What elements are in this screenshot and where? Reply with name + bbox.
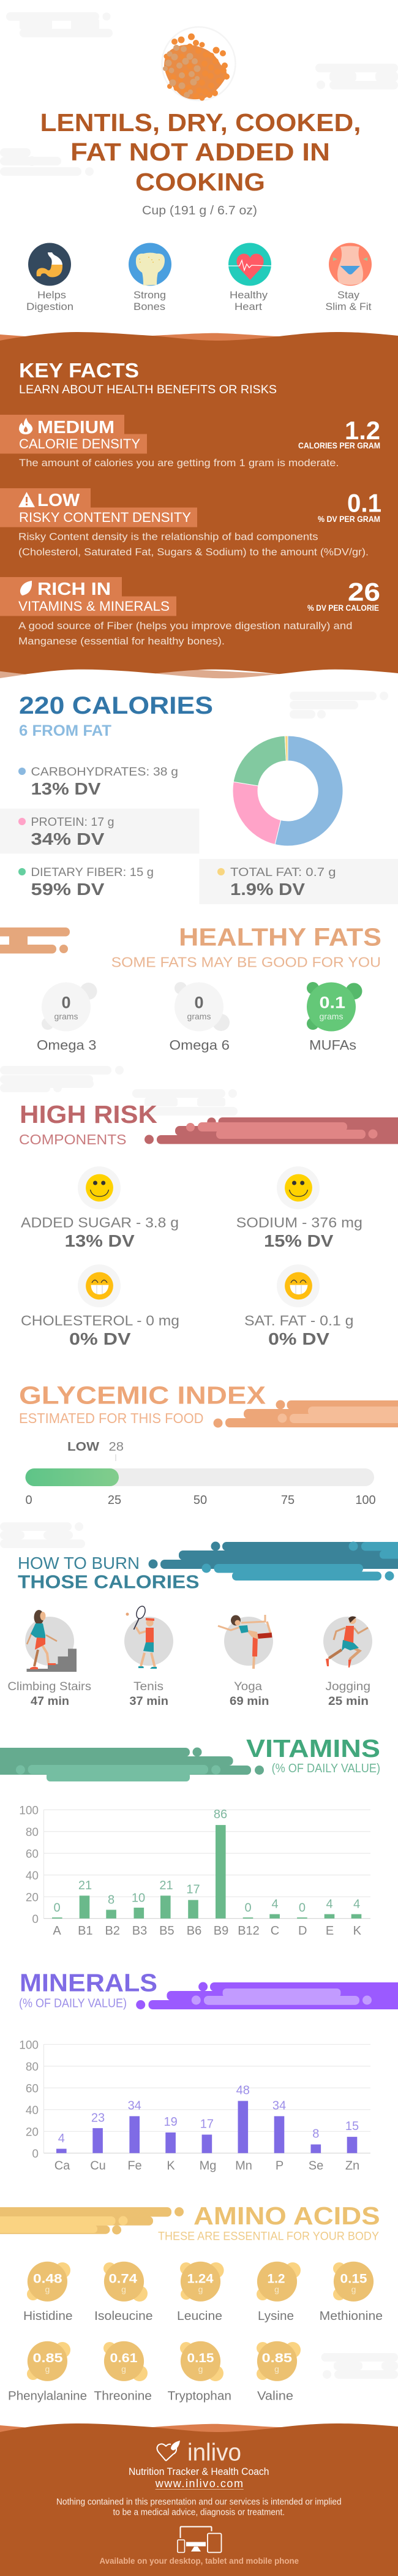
legend: dietary fiber: DIETARY FIBER: 15 g <box>31 866 154 879</box>
donut chart <box>233 736 343 846</box>
activity: yoga <box>218 1615 273 1708</box>
bar chart: vitamins: C <box>271 1924 279 1938</box>
header banner <box>213 1400 398 1427</box>
heading: 220 CALORIES <box>19 692 213 719</box>
bar chart: minerals: 17 <box>200 2117 214 2131</box>
fact: risky content density: 0.1 <box>347 489 381 517</box>
bar chart: vitamins: B2 <box>105 1924 120 1938</box>
item: added sugar: ADDED SUGAR - 3.8 g <box>21 1215 179 1231</box>
bar chart: vitamins: 60 <box>26 1848 39 1861</box>
benefit: healthy heart: Heart <box>235 301 262 312</box>
amino: tryptophan: Tryptophan <box>168 2389 231 2403</box>
bar chart: vitamins: B12 <box>238 1924 260 1938</box>
title: COOKING <box>135 168 265 196</box>
bar chart: minerals: Cu <box>90 2159 106 2173</box>
bar chart: vitamins: B3 <box>132 1924 147 1938</box>
amino: histidine <box>23 2262 73 2323</box>
item: cholesterol <box>21 1264 179 1348</box>
gauge bar: 50 <box>193 1494 207 1507</box>
amino: tryptophan: g <box>198 2364 203 2374</box>
activity: yoga: Yoga <box>234 1680 262 1693</box>
header banner <box>0 2207 184 2235</box>
heading: HEALTHY FATS <box>179 923 381 951</box>
amino: threonine: Threonine <box>94 2389 152 2403</box>
tagline and url <box>129 2466 269 2490</box>
amino: phenylalanine: g <box>45 2364 50 2374</box>
amino: valine: g <box>274 2364 279 2374</box>
amino: leucine: Leucine <box>177 2310 222 2323</box>
item: cholesterol: 0% DV <box>69 1329 131 1348</box>
fact: calorie density: CALORIES PER GRAM <box>298 441 380 450</box>
fact: calorie density: The amount of calories you are getting from 1 gram is moderate. <box>19 458 339 469</box>
panel: how to burn those calories <box>7 1541 398 1708</box>
bar chart: minerals: 20 <box>26 2126 39 2139</box>
fact: calorie density: CALORIE DENSITY <box>19 436 140 451</box>
gauge bar <box>25 1440 376 1507</box>
activity: tennis: 37 min <box>129 1695 168 1708</box>
title: LENTILS, DRY, COOKED, <box>40 108 361 137</box>
amino: tryptophan: 0.15 <box>187 2351 214 2365</box>
badge: omega 3: grams <box>54 1011 78 1021</box>
bar chart: vitamins: 100 <box>19 1805 39 1817</box>
legend: total fat <box>200 859 398 904</box>
fact: risky content density: % DV PER GRAM <box>318 515 380 524</box>
panel: minerals <box>19 1969 398 2173</box>
amino: valine <box>257 2341 301 2403</box>
serving size: Cup (191 g / 6.7 oz) <box>142 204 257 217</box>
badge: mufas: MUFAs <box>309 1038 356 1053</box>
fact: risky content density: Risky Content density is the relationship of bad components <box>18 532 318 543</box>
bar chart: minerals: 23 <box>91 2111 105 2125</box>
amino: leucine: g <box>198 2284 203 2294</box>
bar chart: minerals: 4 <box>58 2132 65 2145</box>
amino: histidine: Histidine <box>23 2310 73 2323</box>
benefit: helps digestion: Digestion <box>26 301 73 312</box>
heading: MINERALS <box>20 1969 157 1997</box>
badge: omega 3: Omega 3 <box>37 1038 97 1053</box>
activity: jogging: 25 min <box>328 1695 369 1708</box>
badge: omega 6 <box>169 982 230 1053</box>
panel: header <box>26 27 372 312</box>
bar chart: vitamins: 80 <box>26 1826 39 1839</box>
amino: threonine <box>94 2341 152 2403</box>
amino: lysine: g <box>274 2284 279 2294</box>
fact: risky content density: RISKY CONTENT DENSITY <box>19 510 191 525</box>
heading: HIGH RISK <box>20 1100 157 1128</box>
logo: inlivo <box>187 2439 241 2466</box>
item: saturated fat: 0% DV <box>268 1329 329 1348</box>
legend: protein: 34% DV <box>31 829 105 848</box>
bar chart: vitamins: 4 <box>326 1897 333 1911</box>
bar chart: minerals: 40 <box>26 2104 39 2117</box>
bar chart: vitamins: 17 <box>186 1883 200 1897</box>
legend: carbohydrates: 13% DV <box>31 779 101 798</box>
fact: rich in vitamins and minerals: 26 <box>348 577 380 606</box>
bar chart: vitamins: K <box>353 1924 362 1938</box>
badge: omega 6: 0 <box>194 994 204 1012</box>
amino: valine: Valine <box>257 2389 293 2403</box>
heading: VITAMINS <box>246 1734 380 1762</box>
bar chart: minerals: 8 <box>312 2127 319 2140</box>
bar chart: vitamins: 21 <box>78 1879 92 1892</box>
heading <box>158 2202 380 2243</box>
header banner <box>148 1541 398 1581</box>
amino: lysine: Lysine <box>258 2310 294 2323</box>
icon: leaf <box>20 581 32 595</box>
gauge bar: 28 <box>109 1440 124 1454</box>
fact: rich in vitamins and minerals: VITAMINS & MINERALS <box>18 599 170 614</box>
legend: carbohydrates: CARBOHYDRATES: 38 g <box>31 765 178 779</box>
header banner <box>136 1982 398 2009</box>
bar chart: vitamins: A <box>53 1924 61 1938</box>
badge: omega 3: 0 <box>61 994 71 1012</box>
activity: jogging: Jogging <box>326 1680 370 1693</box>
gauge bar: LOW <box>67 1440 99 1454</box>
disclaimer: to be a medical advice, diagnosis or treatment. <box>113 2508 285 2518</box>
heading <box>18 1554 200 1593</box>
amino: histidine: 0.48 <box>33 2272 62 2286</box>
bar chart: minerals: 34 <box>272 2099 286 2112</box>
amino: phenylalanine <box>8 2341 87 2403</box>
heading: LEARN ABOUT HEALTH BENEFITS OR RISKS <box>19 383 277 396</box>
heading <box>19 359 277 396</box>
bar chart: minerals: 0 <box>32 2148 39 2161</box>
heading <box>111 923 381 970</box>
food photo: red lentils <box>162 27 235 100</box>
heading: 6 FROM FAT <box>19 722 111 739</box>
amino: isoleucine <box>94 2262 153 2323</box>
amino: isoleucine: g <box>121 2284 126 2294</box>
amino: lysine <box>257 2262 301 2323</box>
tagline and url: www.inlivo.com <box>155 2477 243 2490</box>
title <box>40 108 361 196</box>
fact: calorie density: 1.2 <box>345 416 380 445</box>
panel: healthy fats <box>0 923 381 1053</box>
bar chart: vitamins: 4 <box>353 1897 360 1911</box>
amino: threonine: g <box>121 2364 126 2374</box>
benefit: strong bones: Bones <box>133 301 165 312</box>
heading: ESTIMATED FOR THIS FOOD <box>19 1410 203 1426</box>
amino: lysine: 1.2 <box>267 2272 285 2286</box>
item: saturated fat: SAT. FAT - 0.1 g <box>244 1313 354 1329</box>
panel: footer <box>0 2423 398 2576</box>
item: sodium: SODIUM - 376 mg <box>236 1215 362 1231</box>
icon: warning triangle <box>18 492 35 507</box>
fact: calorie density: MEDIUM <box>37 418 115 437</box>
bar chart: minerals: 80 <box>26 2061 39 2074</box>
bar chart: minerals: K <box>167 2159 175 2173</box>
bar chart: minerals: Mg <box>200 2159 216 2173</box>
bar chart: vitamins: B6 <box>187 1924 201 1938</box>
panel: amino acids <box>0 2202 383 2403</box>
heading: KEY FACTS <box>19 359 139 382</box>
icon: flame <box>19 418 32 434</box>
item: sodium <box>236 1166 362 1250</box>
activity: yoga: 69 min <box>230 1695 269 1708</box>
gauge bar: 25 <box>108 1494 121 1507</box>
item: added sugar: 13% DV <box>65 1231 135 1250</box>
bar chart: minerals: Zn <box>345 2159 359 2173</box>
panel: high risk components <box>19 1100 398 1348</box>
bar chart: minerals: 60 <box>26 2083 39 2095</box>
legend: protein <box>0 809 200 854</box>
heading <box>19 1381 266 1426</box>
bar chart: minerals: 15 <box>345 2120 359 2133</box>
item: sodium: 15% DV <box>264 1231 334 1250</box>
bar chart: vitamins: 10 <box>132 1891 145 1905</box>
title: FAT NOT ADDED IN <box>70 138 330 166</box>
amino: leucine <box>177 2262 224 2323</box>
bar chart: minerals: P <box>276 2159 283 2173</box>
amino: isoleucine: 0.74 <box>109 2272 137 2286</box>
heading: THESE ARE ESSENTIAL FOR YOUR BODY <box>158 2230 379 2243</box>
amino: methionine: Methionine <box>320 2310 383 2323</box>
header banner <box>0 927 70 953</box>
bar chart: vitamins: 20 <box>26 1892 39 1904</box>
badge: omega 3 <box>37 983 97 1053</box>
bar chart: vitamins <box>19 1805 370 1938</box>
benefit: strong bones <box>129 243 171 312</box>
bar chart: vitamins: B9 <box>214 1924 228 1938</box>
benefit: healthy heart <box>228 243 271 312</box>
disclaimer <box>56 2498 342 2518</box>
legend: protein: PROTEIN: 17 g <box>31 815 115 829</box>
panel: key facts <box>0 332 398 678</box>
bar chart: vitamins: 0 <box>299 1902 306 1915</box>
activity: jogging <box>323 1616 372 1708</box>
bar chart: minerals <box>19 2039 370 2173</box>
badge: omega 6: Omega 6 <box>169 1038 230 1053</box>
fact: risky content density: LOW <box>37 491 80 510</box>
heading <box>19 1969 157 2011</box>
legend: carbohydrates <box>18 765 178 798</box>
logo <box>157 2439 241 2466</box>
amino: threonine: 0.61 <box>110 2351 138 2365</box>
item: cholesterol: CHOLESTEROL - 0 mg <box>21 1313 179 1329</box>
bar chart: minerals: 19 <box>163 2115 178 2129</box>
legend: total fat: TOTAL FAT: 0.7 g <box>230 866 336 879</box>
bar chart: vitamins: 21 <box>159 1879 173 1892</box>
badge: omega 6: grams <box>187 1011 211 1021</box>
fact: rich in vitamins and minerals: Manganese (essential for healthy bones). <box>18 636 225 647</box>
bar chart: minerals: 34 <box>128 2099 141 2112</box>
bar chart: vitamins: 86 <box>214 1808 227 1821</box>
bar chart: vitamins: 8 <box>108 1893 115 1906</box>
badge: mufas: 0.1 <box>320 994 345 1012</box>
heading: GLYCEMIC INDEX <box>19 1381 266 1409</box>
activity: climbing stairs <box>7 1610 91 1708</box>
tagline and url: Nutrition Tracker & Health Coach <box>129 2466 269 2477</box>
fact: rich in vitamins and minerals <box>0 577 380 647</box>
activity: tennis: Tenis <box>133 1680 163 1693</box>
fact: calorie density <box>0 415 380 469</box>
panel: calories <box>0 692 398 904</box>
amino: valine: 0.85 <box>262 2351 292 2365</box>
legend: total fat: 1.9% DV <box>230 880 305 899</box>
availability note: Available on your desktop, tablet and mobile phone <box>99 2556 299 2566</box>
bar chart: minerals: Fe <box>127 2159 142 2173</box>
amino: leucine: 1.24 <box>187 2272 214 2286</box>
amino: phenylalanine: Phenylalanine <box>8 2389 87 2403</box>
activity: climbing stairs: Climbing Stairs <box>7 1680 91 1693</box>
benefit: helps digestion: Helps <box>37 289 66 301</box>
bar chart: vitamins: E <box>326 1924 334 1938</box>
amino: tryptophan <box>168 2341 231 2403</box>
icon: devices <box>178 2526 222 2552</box>
legend: dietary fiber <box>18 866 154 899</box>
bar chart: minerals: Mn <box>235 2159 252 2173</box>
fact: risky content density <box>0 488 381 557</box>
bar chart: vitamins: 0 <box>32 1913 39 1926</box>
benefit: strong bones: Strong <box>133 289 166 301</box>
benefit: healthy heart: Healthy <box>230 289 268 301</box>
activity: climbing stairs: 47 min <box>31 1695 69 1708</box>
bar chart: minerals: 100 <box>19 2039 39 2052</box>
bar chart: vitamins: 40 <box>26 1870 39 1883</box>
bar chart: vitamins: B5 <box>159 1924 175 1938</box>
activity: tennis <box>124 1605 173 1708</box>
benefit: stay slim and fit: Slim & Fit <box>326 301 372 312</box>
bar chart: vitamins: D <box>298 1924 307 1938</box>
heading: COMPONENTS <box>19 1131 126 1147</box>
heading: THOSE CALORIES <box>18 1571 200 1593</box>
heading: (% OF DAILY VALUE) <box>272 1762 380 1775</box>
item: added sugar <box>21 1166 179 1250</box>
heading: (% OF DAILY VALUE) <box>19 1997 127 2011</box>
amino: histidine: g <box>45 2284 50 2294</box>
heading: HOW TO BURN <box>18 1554 140 1573</box>
amino: methionine: 0.15 <box>340 2272 367 2286</box>
fact: rich in vitamins and minerals: % DV PER CALORIE <box>307 603 379 613</box>
bar chart: minerals: 48 <box>236 2084 250 2098</box>
panel: vitamins <box>0 1734 380 1938</box>
amino: phenylalanine: 0.85 <box>33 2351 63 2365</box>
gauge bar: 100 <box>355 1494 376 1507</box>
amino: isoleucine: Isoleucine <box>94 2310 153 2323</box>
gauge bar: 0 <box>25 1494 32 1507</box>
item: saturated fat <box>244 1264 354 1348</box>
fact: rich in vitamins and minerals: RICH IN <box>37 580 111 599</box>
heading: SOME FATS MAY BE GOOD FOR YOU <box>111 954 381 970</box>
bar chart: minerals: Ca <box>54 2159 70 2173</box>
fact: risky content density: (Cholesterol, Saturated Fat, Sugars & Sodium) to the amount (%DV/gr). <box>18 546 369 557</box>
bar chart: vitamins: 0 <box>244 1902 252 1915</box>
panel: glycemic index <box>19 1381 398 1507</box>
gauge bar: 75 <box>281 1494 295 1507</box>
heading <box>19 1100 157 1147</box>
disclaimer: Nothing contained in this presentation and our services is intended or implied <box>56 2498 342 2507</box>
heading <box>246 1734 380 1775</box>
amino: methionine <box>320 2262 383 2323</box>
benefit: stay slim and fit: Stay <box>337 289 360 301</box>
fact: rich in vitamins and minerals: A good source of Fiber (helps you improve digestion naturally) and <box>18 621 353 632</box>
bar chart: vitamins: 0 <box>53 1902 61 1915</box>
heading <box>19 692 213 739</box>
bar chart: vitamins: 4 <box>271 1897 279 1911</box>
header banner <box>0 1747 264 1781</box>
badge: mufas: grams <box>320 1011 343 1021</box>
bar chart: minerals: Se <box>309 2159 323 2173</box>
legend: dietary fiber: 59% DV <box>31 880 105 899</box>
bar chart: vitamins: B1 <box>78 1924 93 1938</box>
header banner <box>145 1117 398 1144</box>
heading: AMINO ACIDS <box>193 2202 380 2230</box>
amino: methionine: g <box>351 2284 356 2294</box>
badge: mufas <box>307 982 362 1053</box>
benefit: stay slim and fit <box>326 243 372 312</box>
benefit: helps digestion <box>26 243 73 312</box>
